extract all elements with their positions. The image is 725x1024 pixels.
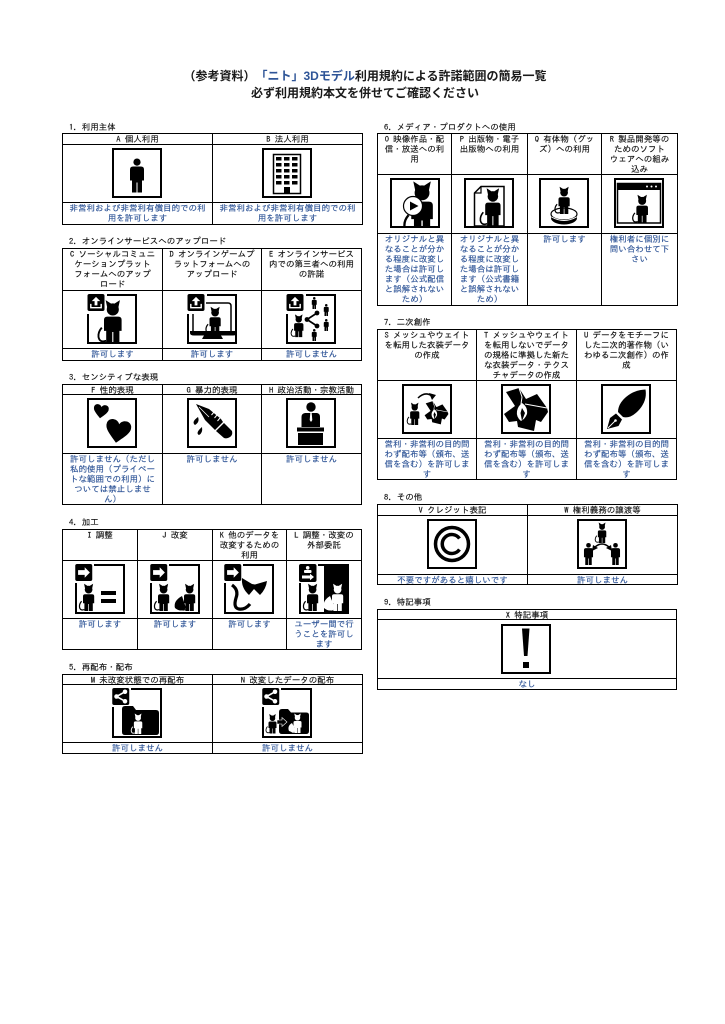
header S: の作成 bbox=[414, 352, 440, 360]
header N bbox=[212, 674, 363, 685]
permission L: ユーザー間で行 bbox=[294, 621, 354, 629]
permission O: ます（公式配信 bbox=[385, 276, 444, 284]
permission T: わず配布等（頒布、送 bbox=[484, 451, 569, 459]
header R bbox=[601, 133, 678, 175]
header J: J 改変 bbox=[162, 532, 188, 540]
permission C bbox=[62, 348, 163, 361]
permission J: 許可します bbox=[154, 621, 196, 629]
heading: section 5: 5. 再配布・配布 bbox=[69, 664, 133, 672]
header T: T メッシュやウェイト bbox=[484, 332, 569, 340]
permission F: 許可しません（ただし bbox=[70, 456, 155, 464]
permission S: す bbox=[423, 471, 431, 479]
header U bbox=[576, 329, 677, 381]
title: （参考資料）「ニト」3Dモデル利用規約による許諾範囲の簡易一覧 bbox=[183, 69, 546, 83]
permission K: 許可します bbox=[228, 621, 271, 629]
header U: した二次的著作物（い bbox=[584, 342, 669, 350]
icon: software window bbox=[614, 178, 664, 228]
icon: transfer of rights bbox=[577, 519, 627, 569]
icon: merchandise figure bbox=[539, 178, 589, 228]
header Q: ズ）への利用 bbox=[539, 146, 590, 154]
permission B: 非営利および非営利有償目的での利 bbox=[220, 205, 356, 213]
permission S bbox=[377, 438, 477, 480]
heading: section 7: 7. 二次創作 bbox=[384, 319, 431, 327]
header W: W 権利義務の譲渡等 bbox=[564, 507, 641, 515]
icon: modification two cats bbox=[150, 564, 200, 614]
panel: section 1 usage subject bbox=[62, 133, 363, 225]
header S bbox=[377, 329, 477, 381]
permission P bbox=[451, 233, 528, 306]
header B bbox=[212, 133, 363, 145]
icon cell J bbox=[137, 560, 213, 619]
header X bbox=[377, 609, 677, 620]
icon cell N bbox=[212, 684, 363, 743]
header T: を転用しないでデータ bbox=[484, 342, 569, 350]
heading: section 8: 8. その他 bbox=[384, 494, 422, 502]
header C: ロード bbox=[100, 281, 125, 289]
header R: 込み bbox=[631, 166, 648, 174]
header C bbox=[62, 248, 163, 291]
permission N: 許可しません bbox=[262, 745, 313, 753]
permission S: 営利・非営利の目的問 bbox=[384, 441, 470, 449]
permission T: す bbox=[522, 471, 531, 479]
icon cell H bbox=[261, 394, 362, 454]
permission I bbox=[62, 618, 138, 650]
icon: publication bbox=[464, 178, 514, 228]
header I bbox=[62, 529, 138, 561]
header K: 改変するための bbox=[220, 542, 279, 550]
header A: A 個人利用 bbox=[116, 136, 159, 144]
header S: を転用した衣装データ bbox=[384, 342, 470, 350]
icon cell K bbox=[212, 560, 287, 619]
header K bbox=[212, 529, 287, 561]
header D bbox=[162, 248, 262, 291]
permission A bbox=[62, 202, 213, 225]
icon cell Q bbox=[527, 174, 602, 234]
permission O: ため） bbox=[402, 296, 427, 304]
permission P: る程度に改変し bbox=[460, 256, 519, 264]
panel: section 3 sensitive expression bbox=[62, 384, 362, 505]
permission V bbox=[377, 574, 528, 585]
icon cell A: person bbox=[62, 144, 213, 203]
permission R: 問い合わせて下 bbox=[610, 246, 669, 254]
header D: アップロード bbox=[186, 271, 238, 279]
header Q: Q 有体物（グッ bbox=[535, 136, 594, 144]
permission P: ため） bbox=[477, 296, 502, 304]
title: 必ず利用規約本文を併せてご確認ください bbox=[251, 86, 479, 100]
icon cell I bbox=[62, 560, 138, 619]
permission F: ついては禁止しませ bbox=[74, 486, 151, 494]
icon: person bbox=[112, 148, 162, 198]
header F: F 性的表現 bbox=[91, 387, 134, 395]
permission G: 許可しません bbox=[186, 456, 238, 464]
header G bbox=[162, 384, 262, 395]
heading: section 2: 2. オンラインサービスへのアップロード bbox=[69, 238, 226, 246]
header O bbox=[377, 133, 452, 175]
header U: わゆる二次創作）の作 bbox=[584, 352, 669, 360]
header X: X 特記事項 bbox=[506, 612, 548, 620]
icon: share folder bbox=[112, 688, 162, 738]
header R: R 製品開発等の bbox=[610, 136, 669, 144]
permission W bbox=[527, 574, 678, 585]
icon cell S bbox=[377, 380, 477, 439]
header O: O 映像作品・配 bbox=[385, 136, 444, 144]
permission A: 用を許可します bbox=[108, 215, 167, 223]
icon cell X bbox=[377, 619, 677, 679]
permission U: す bbox=[622, 471, 631, 479]
permission B bbox=[212, 202, 363, 225]
permission D: 許可します bbox=[191, 351, 233, 359]
header V: V クレジット表記 bbox=[418, 507, 486, 515]
permission F bbox=[62, 453, 163, 505]
header B: B 法人利用 bbox=[266, 136, 309, 144]
permission W: 許可しません bbox=[577, 577, 628, 585]
permission F: トな範囲での利用）に bbox=[70, 476, 155, 484]
permission O: オリジナルと異 bbox=[385, 236, 444, 244]
permission P: ます（公式書籍 bbox=[460, 276, 519, 284]
permission P: と誤解されない bbox=[460, 286, 519, 294]
icon: speaker at podium bbox=[286, 398, 336, 448]
icon cell L bbox=[286, 560, 362, 619]
permission T: 信を含む）を許可しま bbox=[484, 461, 569, 469]
icon cell M bbox=[62, 684, 213, 743]
header V bbox=[377, 504, 528, 516]
icon cell F bbox=[62, 394, 163, 454]
header E: 内での第三者への利用 bbox=[269, 261, 354, 269]
icon: clothing bbox=[501, 384, 551, 434]
icon cell P bbox=[451, 174, 528, 234]
icon cell W bbox=[527, 515, 678, 575]
header K: K 他のデータを bbox=[220, 532, 279, 540]
permission L: ます bbox=[316, 641, 332, 649]
header O: 用 bbox=[410, 156, 419, 164]
permission E bbox=[261, 348, 362, 361]
header T: の規格に準拠した新た bbox=[484, 352, 569, 360]
icon: building bbox=[262, 148, 312, 198]
icon cell O bbox=[377, 174, 452, 234]
header K: 利用 bbox=[241, 552, 258, 560]
permission Q: 許可します bbox=[543, 236, 586, 244]
panel: section 6 media and products bbox=[377, 133, 678, 306]
heading: section 6: 6. メディア・プロダクトへの使用 bbox=[384, 124, 516, 132]
header L bbox=[286, 529, 362, 561]
title bbox=[183, 69, 546, 100]
permission H bbox=[261, 453, 362, 505]
header C: フォームへのアップ bbox=[74, 271, 151, 279]
icon cell U bbox=[576, 380, 677, 439]
header D: D オンラインゲームプ bbox=[170, 251, 254, 259]
header E: E オンラインサービス bbox=[269, 251, 354, 259]
header F bbox=[62, 384, 163, 395]
header N: N 改変したデータの配布 bbox=[241, 677, 334, 685]
header P: P 出版物・電子 bbox=[460, 136, 519, 144]
icon: video with cat bbox=[390, 178, 440, 228]
icon: knife bbox=[187, 398, 237, 448]
icon: hearts bbox=[87, 398, 137, 448]
permission V: 不要ですがあると嬉しいです bbox=[397, 577, 508, 585]
icon: outsourcing with white cat bbox=[299, 564, 349, 614]
icon: fountain pen bbox=[601, 384, 651, 434]
icon: exclamation bbox=[501, 624, 551, 674]
icon: modified share bbox=[262, 688, 312, 738]
permission E: 許可しません bbox=[286, 351, 337, 359]
icon: upload game monitor bbox=[187, 294, 237, 344]
permission O: と誤解されない bbox=[385, 286, 444, 294]
panel: section 9 special notes bbox=[377, 609, 677, 690]
icon cell R bbox=[601, 174, 678, 234]
icon: upload cat bbox=[87, 294, 137, 344]
permission P: なることが分か bbox=[460, 246, 519, 254]
panel: section 5 redistribution bbox=[62, 674, 363, 754]
icon cell G bbox=[162, 394, 262, 454]
permission D bbox=[162, 348, 262, 361]
header L: L 調整・改変の bbox=[294, 532, 354, 540]
header O: 信・放送への利 bbox=[385, 146, 444, 154]
permission P: た場合は許可し bbox=[460, 266, 519, 274]
permission U bbox=[576, 438, 677, 480]
permission M: 許可しません bbox=[112, 745, 163, 753]
permission G bbox=[162, 453, 262, 505]
header C: ケーションプラット bbox=[74, 261, 151, 269]
header W bbox=[527, 504, 678, 516]
permission X: なし bbox=[518, 681, 536, 689]
permission U: わず配布等（頒布、送 bbox=[584, 451, 669, 459]
permission U: 信を含む）を許可しま bbox=[584, 461, 669, 469]
permission B: 用を許可します bbox=[258, 215, 317, 223]
permission T bbox=[476, 438, 577, 480]
permission S: 信を含む）を許可しま bbox=[384, 461, 470, 469]
panel: section 4 processing bbox=[62, 529, 362, 650]
icon: adjustment equal bbox=[75, 564, 125, 614]
panel: section 8 others bbox=[377, 504, 678, 585]
header H bbox=[261, 384, 362, 395]
permission P: オリジナルと異 bbox=[460, 236, 519, 244]
icon cell T bbox=[476, 380, 577, 439]
header A bbox=[62, 133, 213, 145]
header R: ためのソフト bbox=[614, 146, 665, 154]
permission K bbox=[212, 618, 287, 650]
header P bbox=[451, 133, 528, 175]
permission F: 私的使用（プライベー bbox=[70, 466, 155, 474]
header U: U データをモチーフに bbox=[584, 332, 669, 340]
permission R: 権利者に個別に bbox=[610, 236, 669, 244]
permission N bbox=[212, 742, 363, 754]
header E bbox=[261, 248, 362, 291]
permission Q bbox=[527, 233, 602, 306]
permission J bbox=[137, 618, 213, 650]
permission R: さい bbox=[631, 256, 648, 264]
icon cell D bbox=[162, 290, 262, 349]
icon cell C bbox=[62, 290, 163, 349]
permission I: 許可します bbox=[79, 621, 121, 629]
permission U: 営利・非営利の目的問 bbox=[584, 441, 669, 449]
panel: section 7 derivative works bbox=[377, 329, 677, 480]
header S: S メッシュやウェイト bbox=[384, 332, 470, 340]
header J bbox=[137, 529, 213, 561]
icon cell B: building bbox=[212, 144, 363, 203]
icon: tail and bow parts bbox=[224, 564, 274, 614]
heading: section 9: 9. 特記事項 bbox=[384, 599, 431, 607]
header M bbox=[62, 674, 213, 685]
permission O: る程度に改変し bbox=[385, 256, 444, 264]
heading: section 1: 1. 利用主体 bbox=[69, 124, 116, 132]
permission O: た場合は許可し bbox=[385, 266, 444, 274]
permission R bbox=[601, 233, 678, 306]
permission S: わず配布等（頒布、送 bbox=[384, 451, 470, 459]
permission M bbox=[62, 742, 213, 754]
heading: section 4: 4. 加工 bbox=[69, 519, 99, 527]
icon: upload share to third parties bbox=[286, 294, 336, 344]
permission H: 許可しません bbox=[286, 456, 337, 464]
icon cell E bbox=[261, 290, 362, 349]
panel: section 2 upload bbox=[62, 248, 362, 361]
heading: section 3: 3. センシティブな表現 bbox=[69, 374, 158, 382]
header C: C ソーシャルコミュニ bbox=[70, 251, 155, 259]
permission O: なることが分か bbox=[385, 246, 444, 254]
permission T: 営利・非営利の目的問 bbox=[484, 441, 569, 449]
permission F: ん） bbox=[104, 496, 121, 504]
icon cell V bbox=[377, 515, 528, 575]
header D: ラットフォームへの bbox=[174, 261, 250, 269]
header T: チャデータの作成 bbox=[492, 372, 560, 380]
header R: ウェアへの組み bbox=[610, 156, 669, 164]
permission X bbox=[377, 678, 677, 690]
icon: cat to clothing bbox=[402, 384, 452, 434]
header I: I 調整 bbox=[87, 532, 113, 540]
permission O bbox=[377, 233, 452, 306]
header E: の許諾 bbox=[299, 271, 324, 279]
header T: な衣装データ・テクス bbox=[484, 362, 569, 370]
header M: M 未改変状態での再配布 bbox=[91, 677, 184, 685]
icon: copyright bbox=[427, 519, 477, 569]
header H: H 政治活動・宗教活動 bbox=[269, 387, 354, 395]
permission C: 許可します bbox=[91, 351, 134, 359]
header G: G 暴力的表現 bbox=[186, 387, 238, 395]
header P: 出版物への利用 bbox=[460, 146, 519, 154]
header L: 外部委託 bbox=[307, 542, 341, 550]
permission L bbox=[286, 618, 362, 650]
permission A: 非営利および非営利有償目的での利 bbox=[70, 205, 206, 213]
permission L: うことを許可し bbox=[294, 631, 354, 639]
header Q bbox=[527, 133, 602, 175]
header T bbox=[476, 329, 577, 381]
header U: 成 bbox=[622, 362, 631, 370]
